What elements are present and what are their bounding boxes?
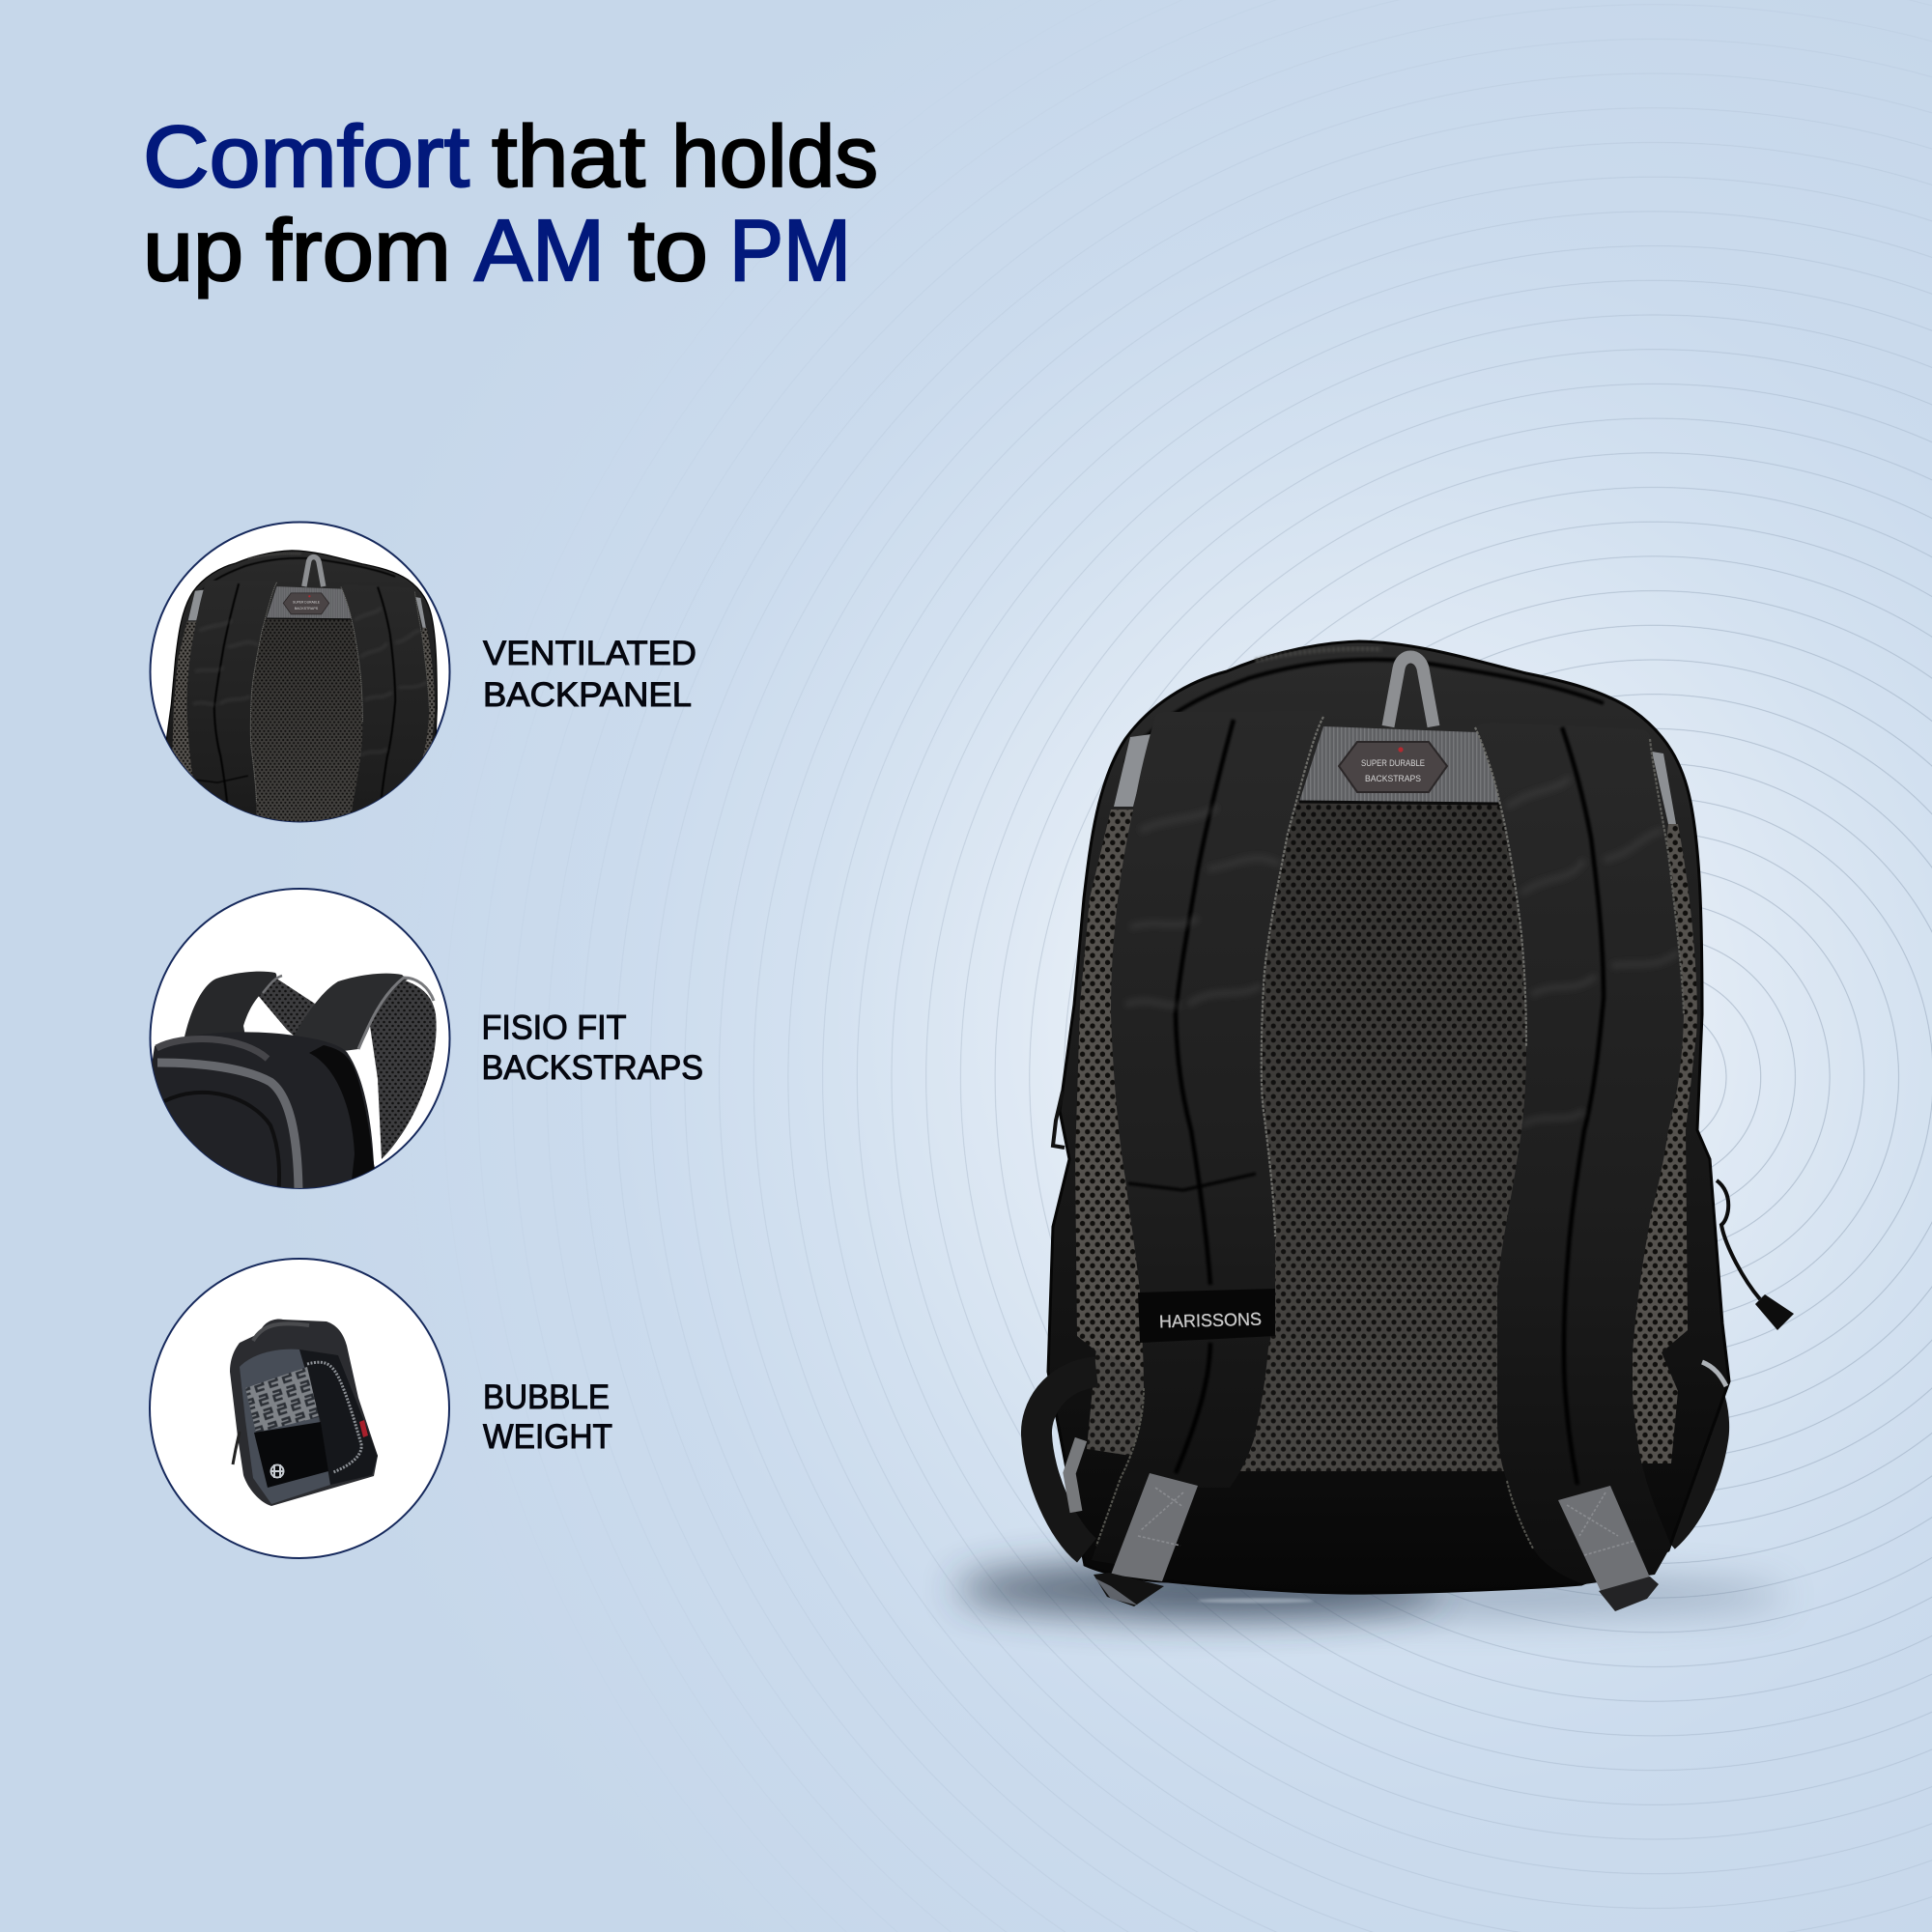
strap grey piping bbox=[358, 978, 434, 1049]
label: ventilated backpanel bbox=[483, 635, 696, 714]
feature 3: bubble weight bbox=[150, 1259, 612, 1558]
pack body bbox=[153, 1032, 375, 1188]
title: Comfort bbox=[143, 109, 469, 206]
right grey side patch bbox=[1652, 752, 1676, 824]
right white trim at base bbox=[1702, 1362, 1726, 1386]
left strap grey piping bbox=[263, 976, 282, 993]
left shoulder strap bbox=[1092, 711, 1323, 1570]
main backpack bbox=[1037, 641, 1794, 1611]
title: to bbox=[628, 203, 708, 299]
left zipper pull bbox=[1053, 1092, 1065, 1148]
left arched strap bbox=[184, 972, 276, 1041]
dark right panel bbox=[299, 1350, 378, 1485]
grey zip trim bbox=[157, 1063, 298, 1190]
small front-view backpack bbox=[230, 1320, 378, 1506]
title: AM bbox=[474, 203, 605, 299]
side zipper bbox=[233, 1432, 240, 1464]
printed pattern patch bbox=[245, 1367, 319, 1433]
label: bubble weight bbox=[483, 1378, 612, 1456]
left pull tab bbox=[1094, 1473, 1198, 1606]
badge dot bbox=[1398, 747, 1404, 753]
Harissons label band bbox=[1138, 1289, 1275, 1343]
right carry loop bbox=[1663, 1357, 1712, 1536]
badge text bbox=[1361, 758, 1425, 784]
title bbox=[143, 109, 878, 299]
left lower mesh bbox=[1087, 1348, 1150, 1459]
right side mesh bbox=[1633, 824, 1697, 1463]
hang loop bbox=[1388, 657, 1434, 726]
right zipper cord and pull bbox=[1717, 1180, 1794, 1330]
logo mark bbox=[270, 1464, 284, 1478]
title: that bbox=[492, 109, 645, 206]
circle photo: strap side view bbox=[135, 889, 450, 1198]
badge text: BACKSTRAPS bbox=[1365, 774, 1421, 784]
front panel shade bbox=[164, 1093, 279, 1198]
label: ventilated backpanel: VENTILATED bbox=[483, 635, 696, 672]
label: bubble weight: WEIGHT bbox=[483, 1418, 612, 1456]
left inner grey webbing bbox=[1069, 1439, 1081, 1512]
title: up bbox=[143, 203, 243, 299]
label: fisio fit backstraps: FISIO FIT bbox=[481, 1009, 626, 1047]
circle photo: front of pack bbox=[150, 1259, 449, 1558]
right arched strap bbox=[293, 974, 408, 1053]
feature 2: fisio fit backstraps bbox=[135, 889, 703, 1198]
top seam and piping bbox=[1125, 660, 1604, 763]
concentric rings pattern bbox=[616, 39, 1932, 1932]
backpack body bbox=[1048, 641, 1729, 1593]
left carry loop bbox=[1037, 1372, 1096, 1550]
right pull tab bbox=[1558, 1486, 1659, 1611]
feature 1: ventilated backpanel bbox=[149, 522, 696, 823]
dotted trace bbox=[307, 1362, 361, 1472]
label: fisio fit backstraps bbox=[481, 1009, 703, 1087]
top handle bbox=[156, 1038, 268, 1059]
hex badge bbox=[1339, 742, 1447, 792]
centre mesh back panel bbox=[1236, 802, 1555, 1471]
blue-grey front panel bbox=[240, 1350, 330, 1504]
label: fisio fit backstraps: BACKSTRAPS bbox=[481, 1049, 703, 1087]
red tag bbox=[359, 1420, 368, 1437]
title: holds bbox=[671, 109, 878, 206]
left side mesh bbox=[1075, 810, 1159, 1388]
label: bubble weight: BUBBLE bbox=[483, 1378, 610, 1416]
black patch bbox=[254, 1422, 328, 1488]
circle photo: backpanel closeup bbox=[149, 522, 450, 823]
centre webbing label panel bbox=[1299, 726, 1502, 804]
badge text: SUPER DURABLE bbox=[1361, 758, 1425, 769]
ground shadow under backpack bbox=[956, 1562, 1787, 1616]
left strap mesh lining bbox=[256, 978, 315, 1037]
right strap mesh lining bbox=[370, 980, 437, 1159]
Harissons label text: HARISSONS bbox=[1159, 1309, 1262, 1331]
left grey side patch bbox=[1114, 734, 1151, 807]
title: PM bbox=[729, 203, 851, 299]
title: from bbox=[266, 203, 451, 299]
right side wall bbox=[309, 1045, 375, 1179]
right shoulder strap bbox=[1475, 723, 1684, 1584]
label: ventilated backpanel: BACKPANEL bbox=[483, 676, 692, 714]
top binding bbox=[1256, 649, 1381, 661]
